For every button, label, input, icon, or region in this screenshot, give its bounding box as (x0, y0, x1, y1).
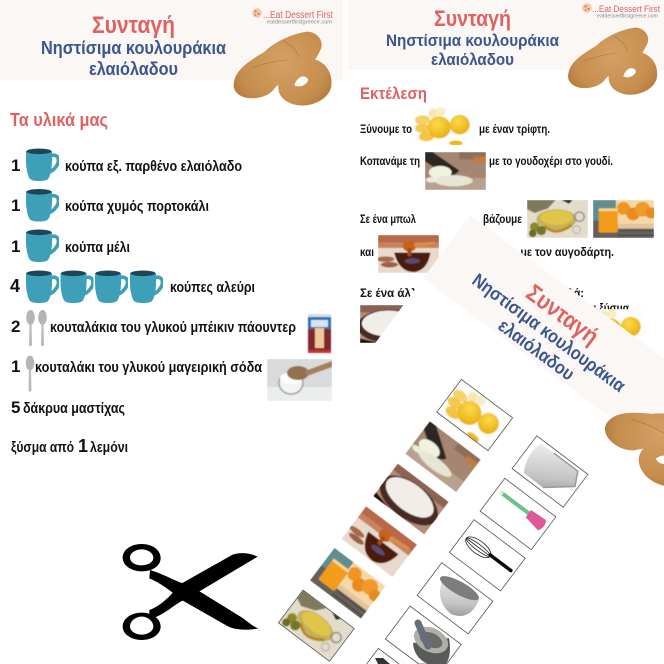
card: mortar and pestle (385, 606, 461, 664)
ingredient: olive oil: 1 (11, 156, 20, 175)
card: baking tray (512, 436, 588, 507)
ingredient: mastic: 5 (11, 398, 20, 417)
card: mixing bowl (417, 563, 493, 634)
ingredient: olive oil: κούπα εξ. παρθένο ελαιόλαδο (65, 159, 242, 175)
ingredient: lemon zest: λεμόνι (90, 440, 128, 456)
logo (582, 3, 660, 19)
step: zest: με έναν τρίφτη. (479, 124, 550, 136)
header band (423, 215, 664, 457)
step: mix liquids: χτυπάμε με τον αυγοδάρτη. (474, 247, 614, 259)
ingredient: flour: κούπες αλεύρι (170, 280, 255, 296)
ingredient: mastic (11, 398, 125, 417)
card: spatula (480, 478, 556, 550)
header band (0, 0, 343, 80)
ingredient: lemon zest: 1 (78, 436, 88, 456)
ingredient: honey: κούπα μέλι (65, 240, 130, 256)
panel: ingredients page (0, 0, 343, 456)
logo: eatdessertfirstgreece.com (267, 20, 332, 26)
logo (252, 8, 333, 25)
ingredient: baking powder (11, 310, 331, 353)
ingredient: flour: 4 (10, 276, 20, 296)
step: zest: Ξύνουμε το (360, 124, 412, 136)
ingredient: baking soda (11, 356, 332, 401)
step: zest (360, 107, 550, 146)
logo: ...Eat Dessert First (263, 10, 333, 21)
subtitle: ελαιόλαδου (431, 50, 514, 69)
panel: rotated cut-out page (138, 215, 664, 664)
cards: kitchen tools (367, 436, 588, 664)
ingredient: baking powder: κουταλάκια του γλυκού μπέικιν πάουντερ (50, 320, 296, 336)
ingredient: olive oil (11, 148, 242, 181)
subtitle: ελαιόλαδου (89, 58, 178, 79)
panel: method page (348, 0, 664, 348)
step: mix dry ingredients: και ξύσμα (582, 303, 629, 315)
ingredient: baking soda: 1 (11, 357, 20, 376)
card: flour (371, 462, 450, 535)
step: mix dry ingredients (357, 288, 646, 348)
image: cookies (568, 28, 657, 95)
header band (348, 0, 664, 70)
card: whisk (449, 520, 525, 591)
heading: ingredients: Τα υλικά μας (10, 110, 108, 130)
step: mix liquids: και (360, 247, 374, 259)
logo (662, 372, 664, 385)
ingredient: orange juice: 1 (11, 196, 20, 215)
logo: eatdessertfirstgreece.com (597, 14, 658, 20)
step: mix dry ingredients: Σε ένα άλλο μπωλ (360, 288, 460, 300)
step: mix liquids: βάζουμε (483, 214, 522, 226)
rotated title and subtitle: Νηστίσιμα κουλουράκια (468, 269, 630, 396)
card: lemons (436, 379, 513, 451)
ingredient: baking powder: 2 (11, 317, 20, 336)
step: crush mastic (360, 152, 613, 190)
title: Συνταγή (434, 6, 511, 31)
ingredient: baking soda: κουταλάκι του γλυκού μαγειρική σόδα (35, 360, 262, 376)
card: mastic (405, 421, 481, 492)
step: mix liquids (360, 200, 657, 273)
ingredient: orange juice (11, 189, 209, 222)
ingredient: flour (10, 270, 255, 303)
image: cookies rotated (595, 379, 664, 497)
subtitle (386, 31, 559, 69)
heading: method: Εκτέλεση (360, 84, 427, 103)
step: crush mastic: με το γουδοχέρι στο γουδί. (489, 156, 613, 168)
rotated title and subtitle: ελαιόλαδου (495, 315, 579, 384)
ingredient: lemon zest: ξύσμα από (11, 440, 74, 456)
card: grater (367, 648, 399, 664)
image: cookies (234, 32, 332, 106)
subtitle: Νηστίσιμα κουλουράκια (386, 31, 559, 50)
subtitle: Νηστίσιμα κουλουράκια (41, 37, 227, 58)
ingredient: honey: 1 (11, 237, 20, 256)
title: Συνταγή (92, 12, 175, 39)
ingredient: mastic: δάκρυα μαστίχας (23, 401, 125, 417)
ingredient: lemon zest (11, 436, 128, 456)
ingredient: honey (11, 230, 130, 262)
card: olive oil (278, 590, 354, 661)
card: honey (341, 505, 417, 577)
subtitle (41, 37, 227, 79)
card: orange juice (310, 548, 388, 621)
icon: scissors (123, 544, 258, 640)
step: mix dry ingredients: ανακατεύουμε καλά: (480, 288, 584, 300)
step: crush mastic: Κοπανάμε τη (360, 156, 420, 168)
rotated title and subtitle: Συνταγή (521, 279, 604, 350)
ingredient: orange juice: κούπα χυμός πορτοκάλι (65, 199, 209, 215)
step: mix liquids: Σε ένα μπωλ (360, 214, 416, 226)
cards: ingredient photos (278, 379, 513, 661)
